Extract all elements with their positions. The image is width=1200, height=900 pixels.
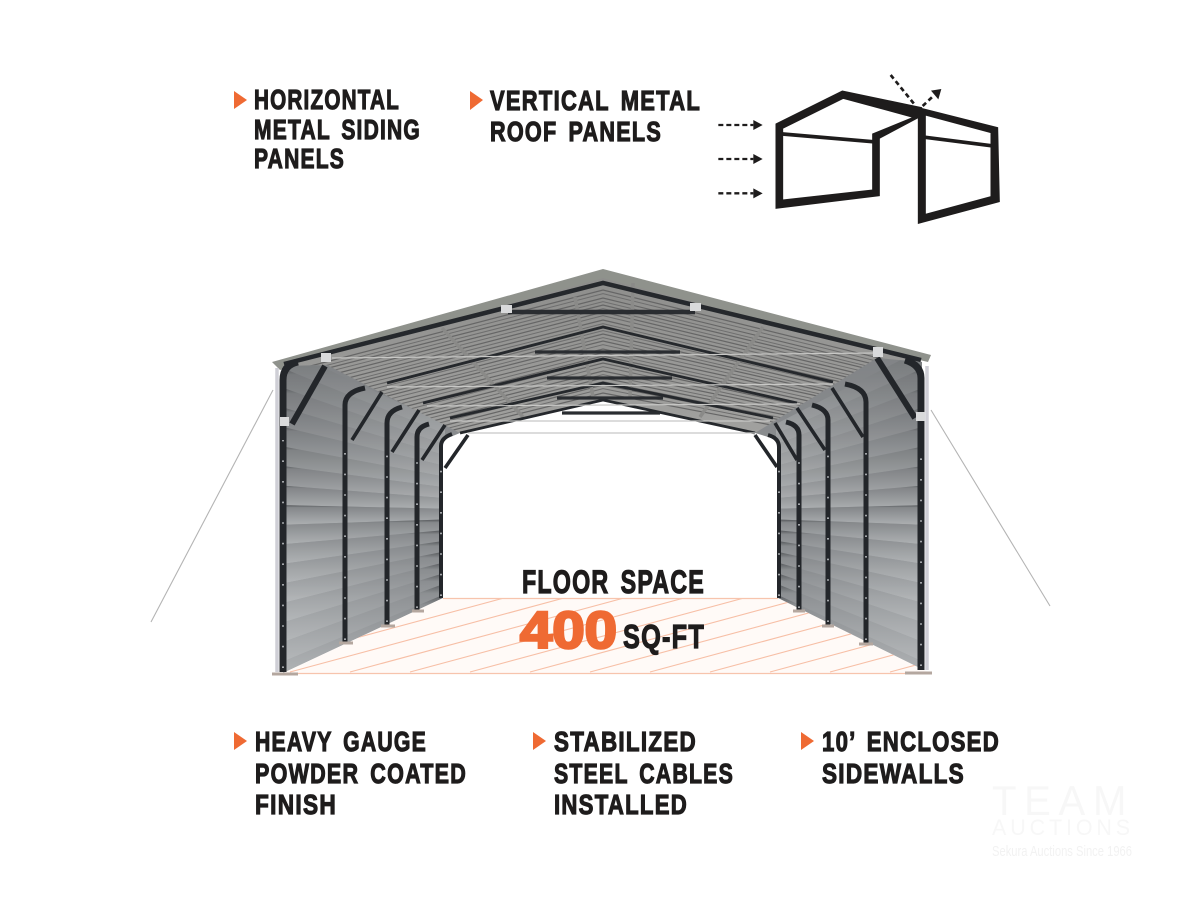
bullet: vertical metal roof panels: ROOF PANELS — [490, 116, 662, 147]
rafters — [387, 327, 833, 433]
left posts and braces — [283, 362, 468, 672]
left wall — [283, 365, 460, 672]
bullet: horizontal metal siding panels: PANELS — [254, 143, 345, 174]
bullet: stabilized steel cables: INSTALLED — [554, 789, 688, 820]
bullet: heavy gauge finish: FINISH — [255, 789, 337, 820]
floor area figure: 400 — [520, 602, 617, 660]
right wall — [756, 358, 922, 667]
bullet: stabilized steel cables: STABILIZED — [554, 726, 697, 757]
roof ceiling — [283, 278, 922, 440]
floor space label: FLOOR SPACE — [522, 564, 705, 600]
bullet: enclosed sidewalls: 10’ ENCLOSED — [822, 726, 1000, 757]
watermark: AUCTIONS — [992, 815, 1134, 840]
floor area figure: SQ-FT — [623, 618, 705, 655]
roof fascia — [272, 269, 931, 370]
bullet: stabilized steel cables — [533, 726, 734, 820]
watermark — [992, 777, 1134, 860]
icon: airflow through carport frame — [718, 75, 999, 223]
edge trim, post base plates and brackets — [277, 366, 927, 672]
opening — [443, 400, 778, 598]
bullet: enclosed sidewalls: SIDEWALLS — [822, 758, 965, 789]
guy cables — [151, 390, 1050, 622]
bullet: heavy gauge finish: POWDER COATED — [255, 758, 467, 789]
watermark: Sekura Auctions Since 1966 — [992, 843, 1132, 860]
floor area figure — [520, 602, 705, 660]
bullet: stabilized steel cables: STEEL CABLES — [554, 758, 734, 789]
bullet: heavy gauge finish — [234, 726, 467, 820]
bullet: heavy gauge finish: HEAVY GAUGE — [255, 726, 427, 757]
bullet: horizontal metal siding panels — [234, 84, 421, 174]
bullet: vertical metal roof panels — [470, 85, 701, 147]
right posts and braces — [755, 358, 921, 670]
bullet: horizontal metal siding panels: HORIZONTAL — [254, 84, 400, 115]
watermark: TEAM — [992, 777, 1134, 824]
ceiling cables — [332, 353, 877, 433]
purlins — [442, 283, 763, 417]
bullet: vertical metal roof panels: VERTICAL METAL — [490, 85, 701, 116]
collar ties — [508, 310, 695, 314]
bullet: enclosed sidewalls — [801, 726, 1000, 789]
carport structure — [150, 269, 1050, 676]
bullet: horizontal metal siding panels: METAL SIDING — [254, 114, 421, 145]
floor — [284, 598, 922, 674]
